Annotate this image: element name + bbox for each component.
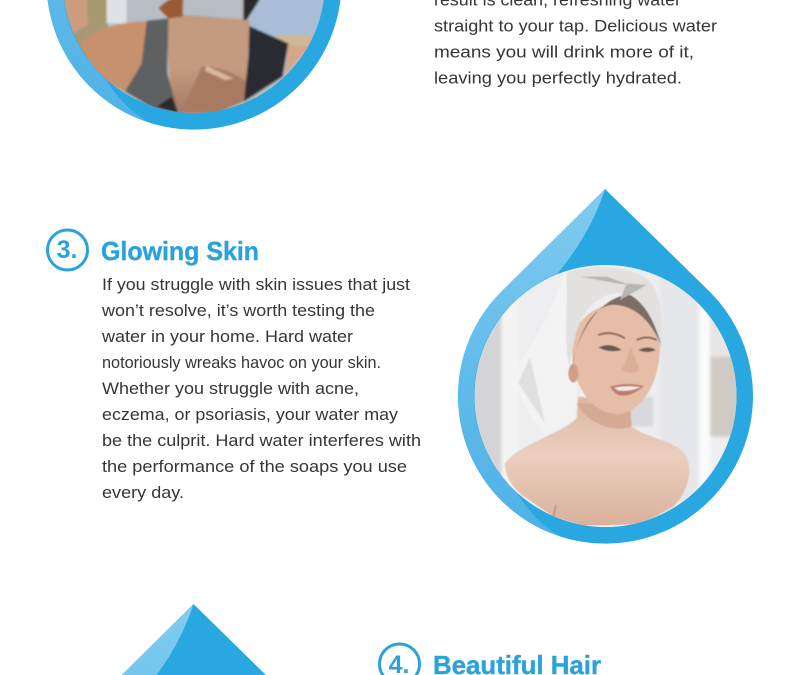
text block: benefit 3 body: the performance of the soaps you use <box>102 457 407 476</box>
number badge: 3: 3. <box>57 236 77 264</box>
photo: woman with tank top <box>64 0 324 113</box>
text block: benefit 3 body: eczema, or psoriasis, your water may <box>102 405 399 424</box>
text block: benefit 3 body: won’t resolve, it’s worth testing the <box>101 301 375 320</box>
number badge: 3 <box>48 230 88 270</box>
text block: benefit 3 body: water in your home. Hard water <box>101 327 353 346</box>
text block: benefit 2 body <box>434 0 717 88</box>
text block: benefit 3 body: every day. <box>102 483 184 502</box>
photo: woman with towel <box>470 263 740 530</box>
text block: benefit 3 body: If you struggle with skin issues that just <box>102 275 410 294</box>
heading: Glowing Skin: Glowing Skin <box>101 236 259 266</box>
drop: top photo frame <box>46 0 341 130</box>
text block: benefit 3 body <box>101 275 421 502</box>
drop: glowing skin photo frame <box>458 189 753 544</box>
drop: beautiful hair photo frame <box>46 604 341 675</box>
text block: benefit 3 body: Whether you struggle with acne, <box>102 379 359 398</box>
text block: benefit 3 body: be the culprit. Hard water interferes with <box>102 431 421 450</box>
text block: benefit 3 body: notoriously wreaks havoc on your skin. <box>102 353 381 372</box>
text block: benefit 2 body: means you will drink more of it, <box>434 42 694 62</box>
text block: benefit 2 body: straight to your tap. Delicious water <box>434 16 717 36</box>
text block: benefit 2 body: leaving you perfectly hydrated. <box>434 68 682 88</box>
number badge: 4 <box>380 644 420 675</box>
